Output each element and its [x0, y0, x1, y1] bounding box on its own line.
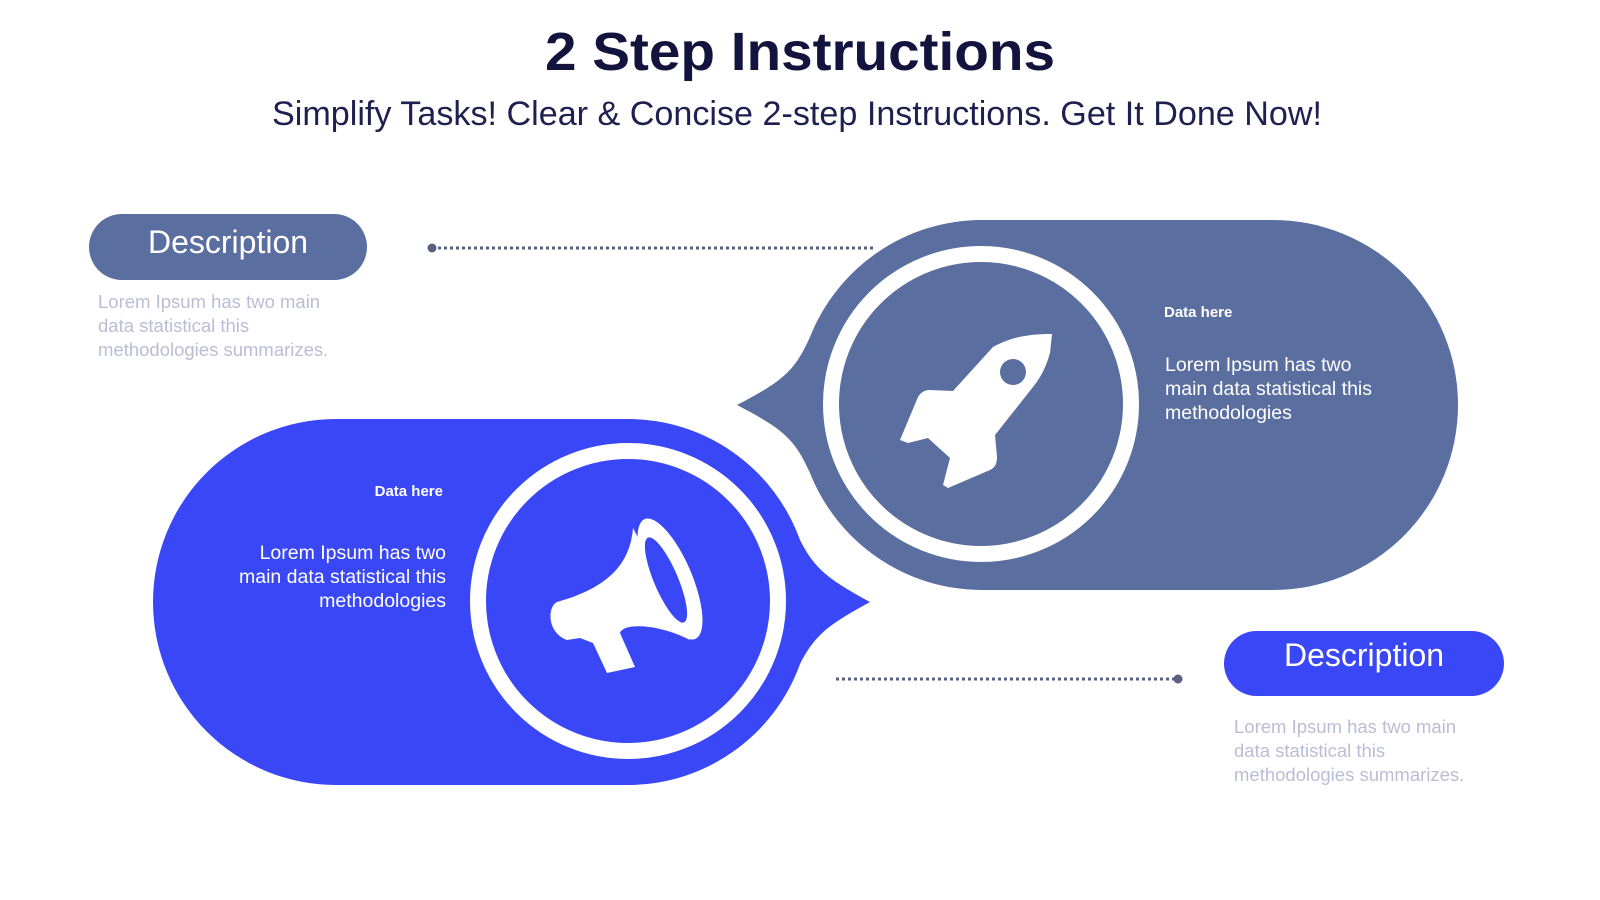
description text right: data statistical this — [1234, 740, 1385, 761]
subtitle: Simplify Tasks! Clear & Concise 2-step Instructions. Get It Done Now! — [272, 95, 1322, 133]
connector right — [836, 674, 1182, 684]
icon: rocket — [900, 334, 1052, 488]
step 1 text: methodologies — [319, 590, 446, 612]
description pill left: Description — [148, 224, 308, 260]
step 2 text: Lorem Ipsum has two — [1165, 354, 1352, 376]
description text right: Lorem Ipsum has two main — [1234, 716, 1456, 737]
icon: megaphone — [550, 511, 716, 673]
description pill right: Description — [1284, 637, 1444, 673]
description text left: data statistical this — [98, 315, 249, 336]
step 1 bubble: blue with megaphone — [153, 419, 870, 785]
step 2 text: methodologies — [1165, 402, 1292, 424]
step 2 bubble: gray with rocket — [737, 220, 1458, 590]
description text right: methodologies summarizes. — [1234, 764, 1464, 785]
step 2 text: main data statistical this — [1165, 378, 1372, 400]
description pill left — [89, 214, 367, 280]
step 1 text: main data statistical this — [239, 566, 446, 588]
description text left: Lorem Ipsum has two main — [98, 291, 320, 312]
description pill right — [1224, 631, 1504, 696]
connector left — [428, 244, 873, 252]
step 1 text: Lorem Ipsum has two — [260, 542, 446, 564]
step 1 label: Data here — [375, 483, 443, 500]
title: 2 Step Instructions — [545, 22, 1055, 82]
step 2 label: Data here — [1164, 304, 1232, 321]
description text left: methodologies summarizes. — [98, 339, 328, 360]
